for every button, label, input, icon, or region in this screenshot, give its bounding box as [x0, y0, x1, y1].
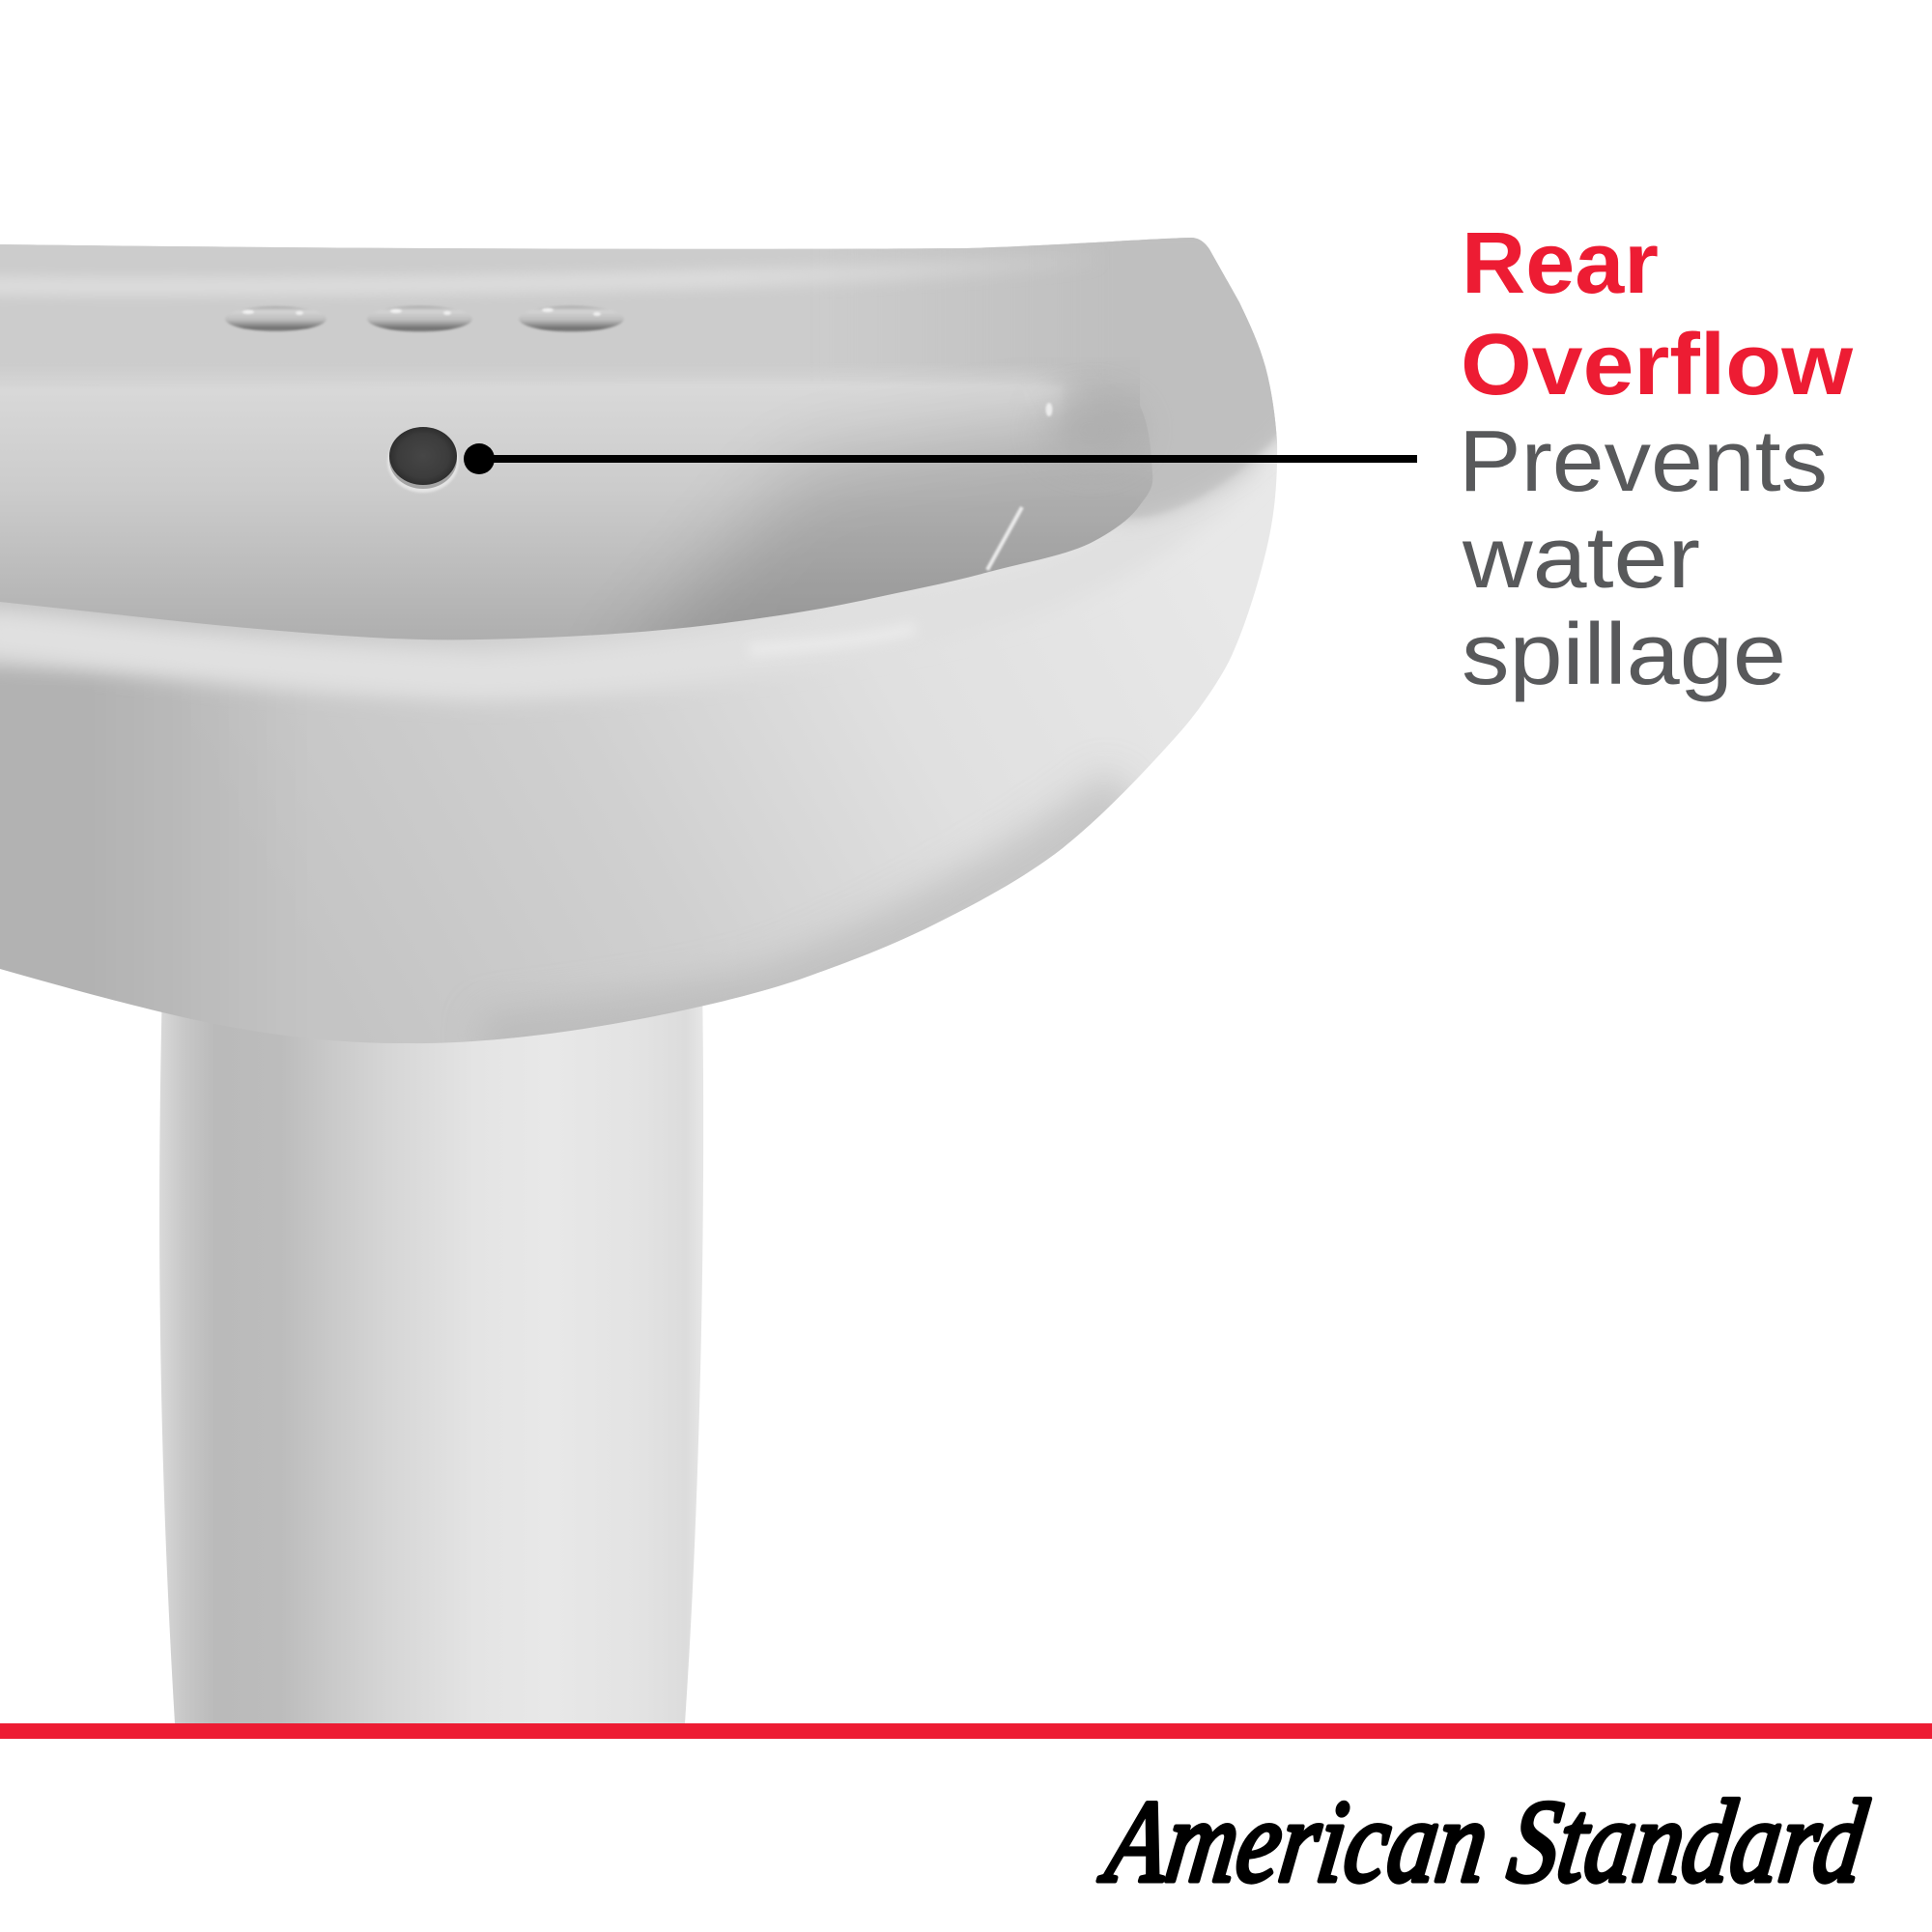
- callout heading: Rear: [1462, 215, 1659, 312]
- rim highlight band: [0, 259, 1101, 287]
- callout heading: Overflow: [1461, 317, 1854, 413]
- overflow hole: [387, 427, 459, 493]
- faucet hole left: [225, 306, 327, 331]
- sink bowl: [0, 222, 1294, 1053]
- basin glint upper: [1045, 403, 1053, 416]
- callout heading: [1461, 215, 1854, 413]
- basin corner shadow upper: [1043, 397, 1140, 463]
- callout description: Prevents: [1459, 413, 1828, 510]
- faucet hole center: [367, 305, 472, 332]
- bowl shading: [0, 222, 1294, 1053]
- basin interior: [0, 377, 1153, 639]
- red divider bar: [0, 1723, 1932, 1739]
- callout leader line: [464, 443, 1417, 474]
- faucet hole right: [519, 305, 624, 332]
- basin right shadow: [638, 404, 1153, 632]
- callout description: water: [1462, 510, 1700, 607]
- bowl body: [0, 238, 1277, 1043]
- basin glint lower: [987, 507, 1022, 570]
- callout text: [1459, 215, 1854, 703]
- callout description: spillage: [1462, 607, 1786, 703]
- pedestal: [159, 985, 703, 1723]
- rim deck: [0, 222, 1294, 522]
- callout description: [1459, 413, 1828, 703]
